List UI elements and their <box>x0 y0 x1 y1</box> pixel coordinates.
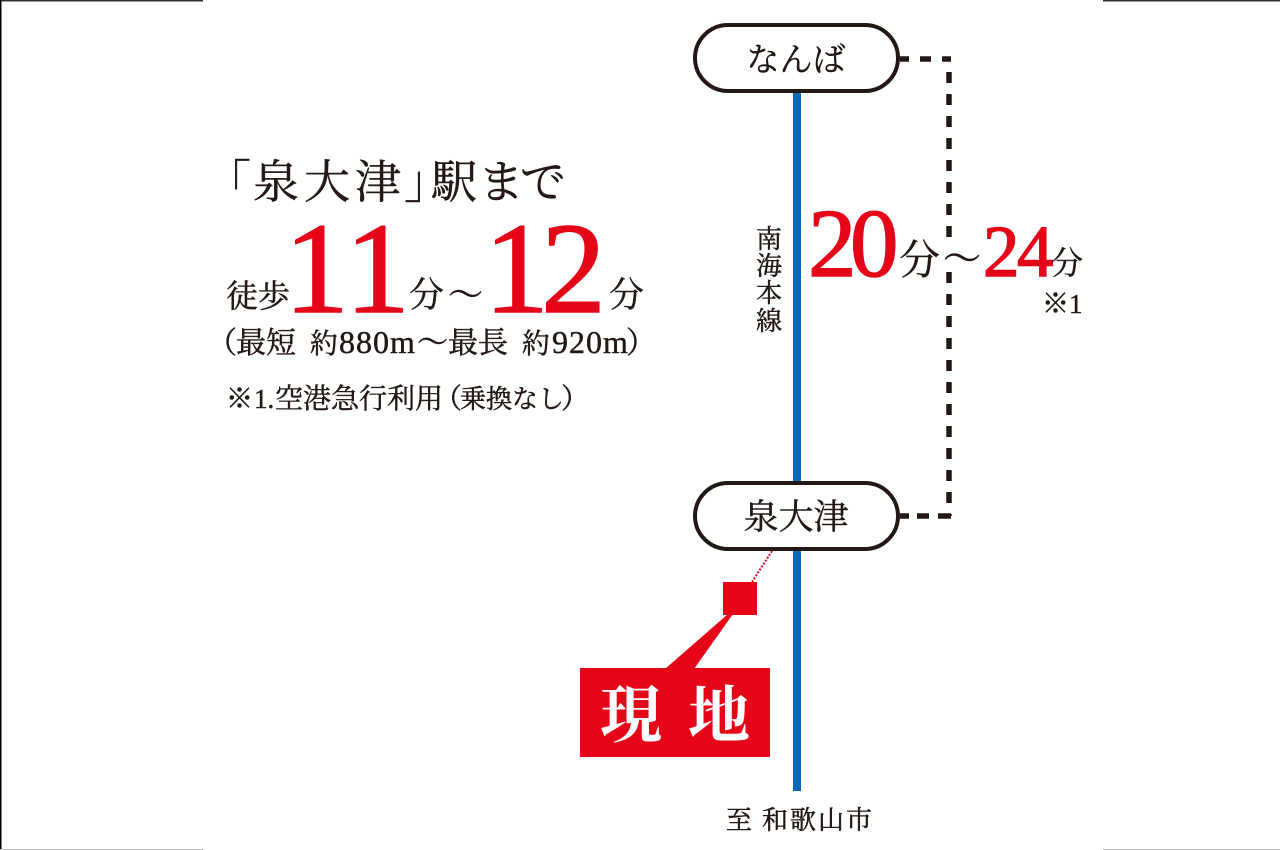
walk time: 11 <box>284 197 410 341</box>
site label box: 地 <box>688 683 750 751</box>
footnote: ） <box>561 383 589 415</box>
footnote: 1. <box>254 384 274 414</box>
footnote: 空港急行利用 <box>275 383 443 415</box>
heading: to Izumiotsu station: 「泉大津」駅まで <box>205 157 566 208</box>
train time: 20 <box>808 190 898 297</box>
line name: Nankai main line: 海 <box>756 252 782 281</box>
footnote: （ <box>434 383 462 415</box>
walk distance note: ） <box>626 327 656 360</box>
station pill: Namba <box>695 25 898 91</box>
walk distance note: 約 <box>310 328 338 360</box>
walk time: 分 <box>609 276 644 315</box>
dashed connector between stations <box>900 59 951 516</box>
site label box <box>580 668 770 757</box>
train time: ※1 <box>1042 289 1082 319</box>
line name: Nankai main line: 線 <box>756 307 782 336</box>
site label box: 現 <box>600 683 662 751</box>
walk distance note <box>207 324 656 360</box>
station pill: Izumiotsu: 泉大津 <box>743 498 849 537</box>
train time: 24 <box>983 211 1054 292</box>
footnote: 乗換なし <box>460 385 564 414</box>
station pill: Izumiotsu <box>695 483 898 549</box>
walk time: 12 <box>484 197 606 341</box>
footnote <box>226 383 589 415</box>
walk distance note: 最長 <box>448 327 508 360</box>
walk time: 〜 <box>448 276 483 315</box>
train time: 分 <box>1051 245 1083 281</box>
walk time <box>226 197 644 341</box>
walk distance note: （ <box>207 327 237 360</box>
train time: 〜 <box>943 239 981 281</box>
site marker with dotted leader <box>665 551 772 669</box>
station pill: Namba: なんば <box>746 43 846 79</box>
walk distance note: 最短 <box>236 327 296 360</box>
walk distance note: 約 <box>522 328 550 360</box>
walk distance note: 920m <box>552 324 629 360</box>
walk distance note: 〜 <box>417 325 448 360</box>
line name: Nankai main line <box>756 225 782 336</box>
train time: 分 <box>899 237 940 283</box>
walk distance note: 880m <box>339 324 416 360</box>
walk time: 徒歩 <box>226 278 290 314</box>
line name: Nankai main line: 本 <box>756 279 782 308</box>
train time <box>808 190 1083 319</box>
walk time: 分 <box>409 276 444 315</box>
destination label: 至和歌山市 <box>726 806 872 835</box>
footnote: ※ <box>226 384 253 414</box>
rail line: Nankai main line <box>793 90 801 791</box>
line name: Nankai main line: 南 <box>756 225 782 254</box>
